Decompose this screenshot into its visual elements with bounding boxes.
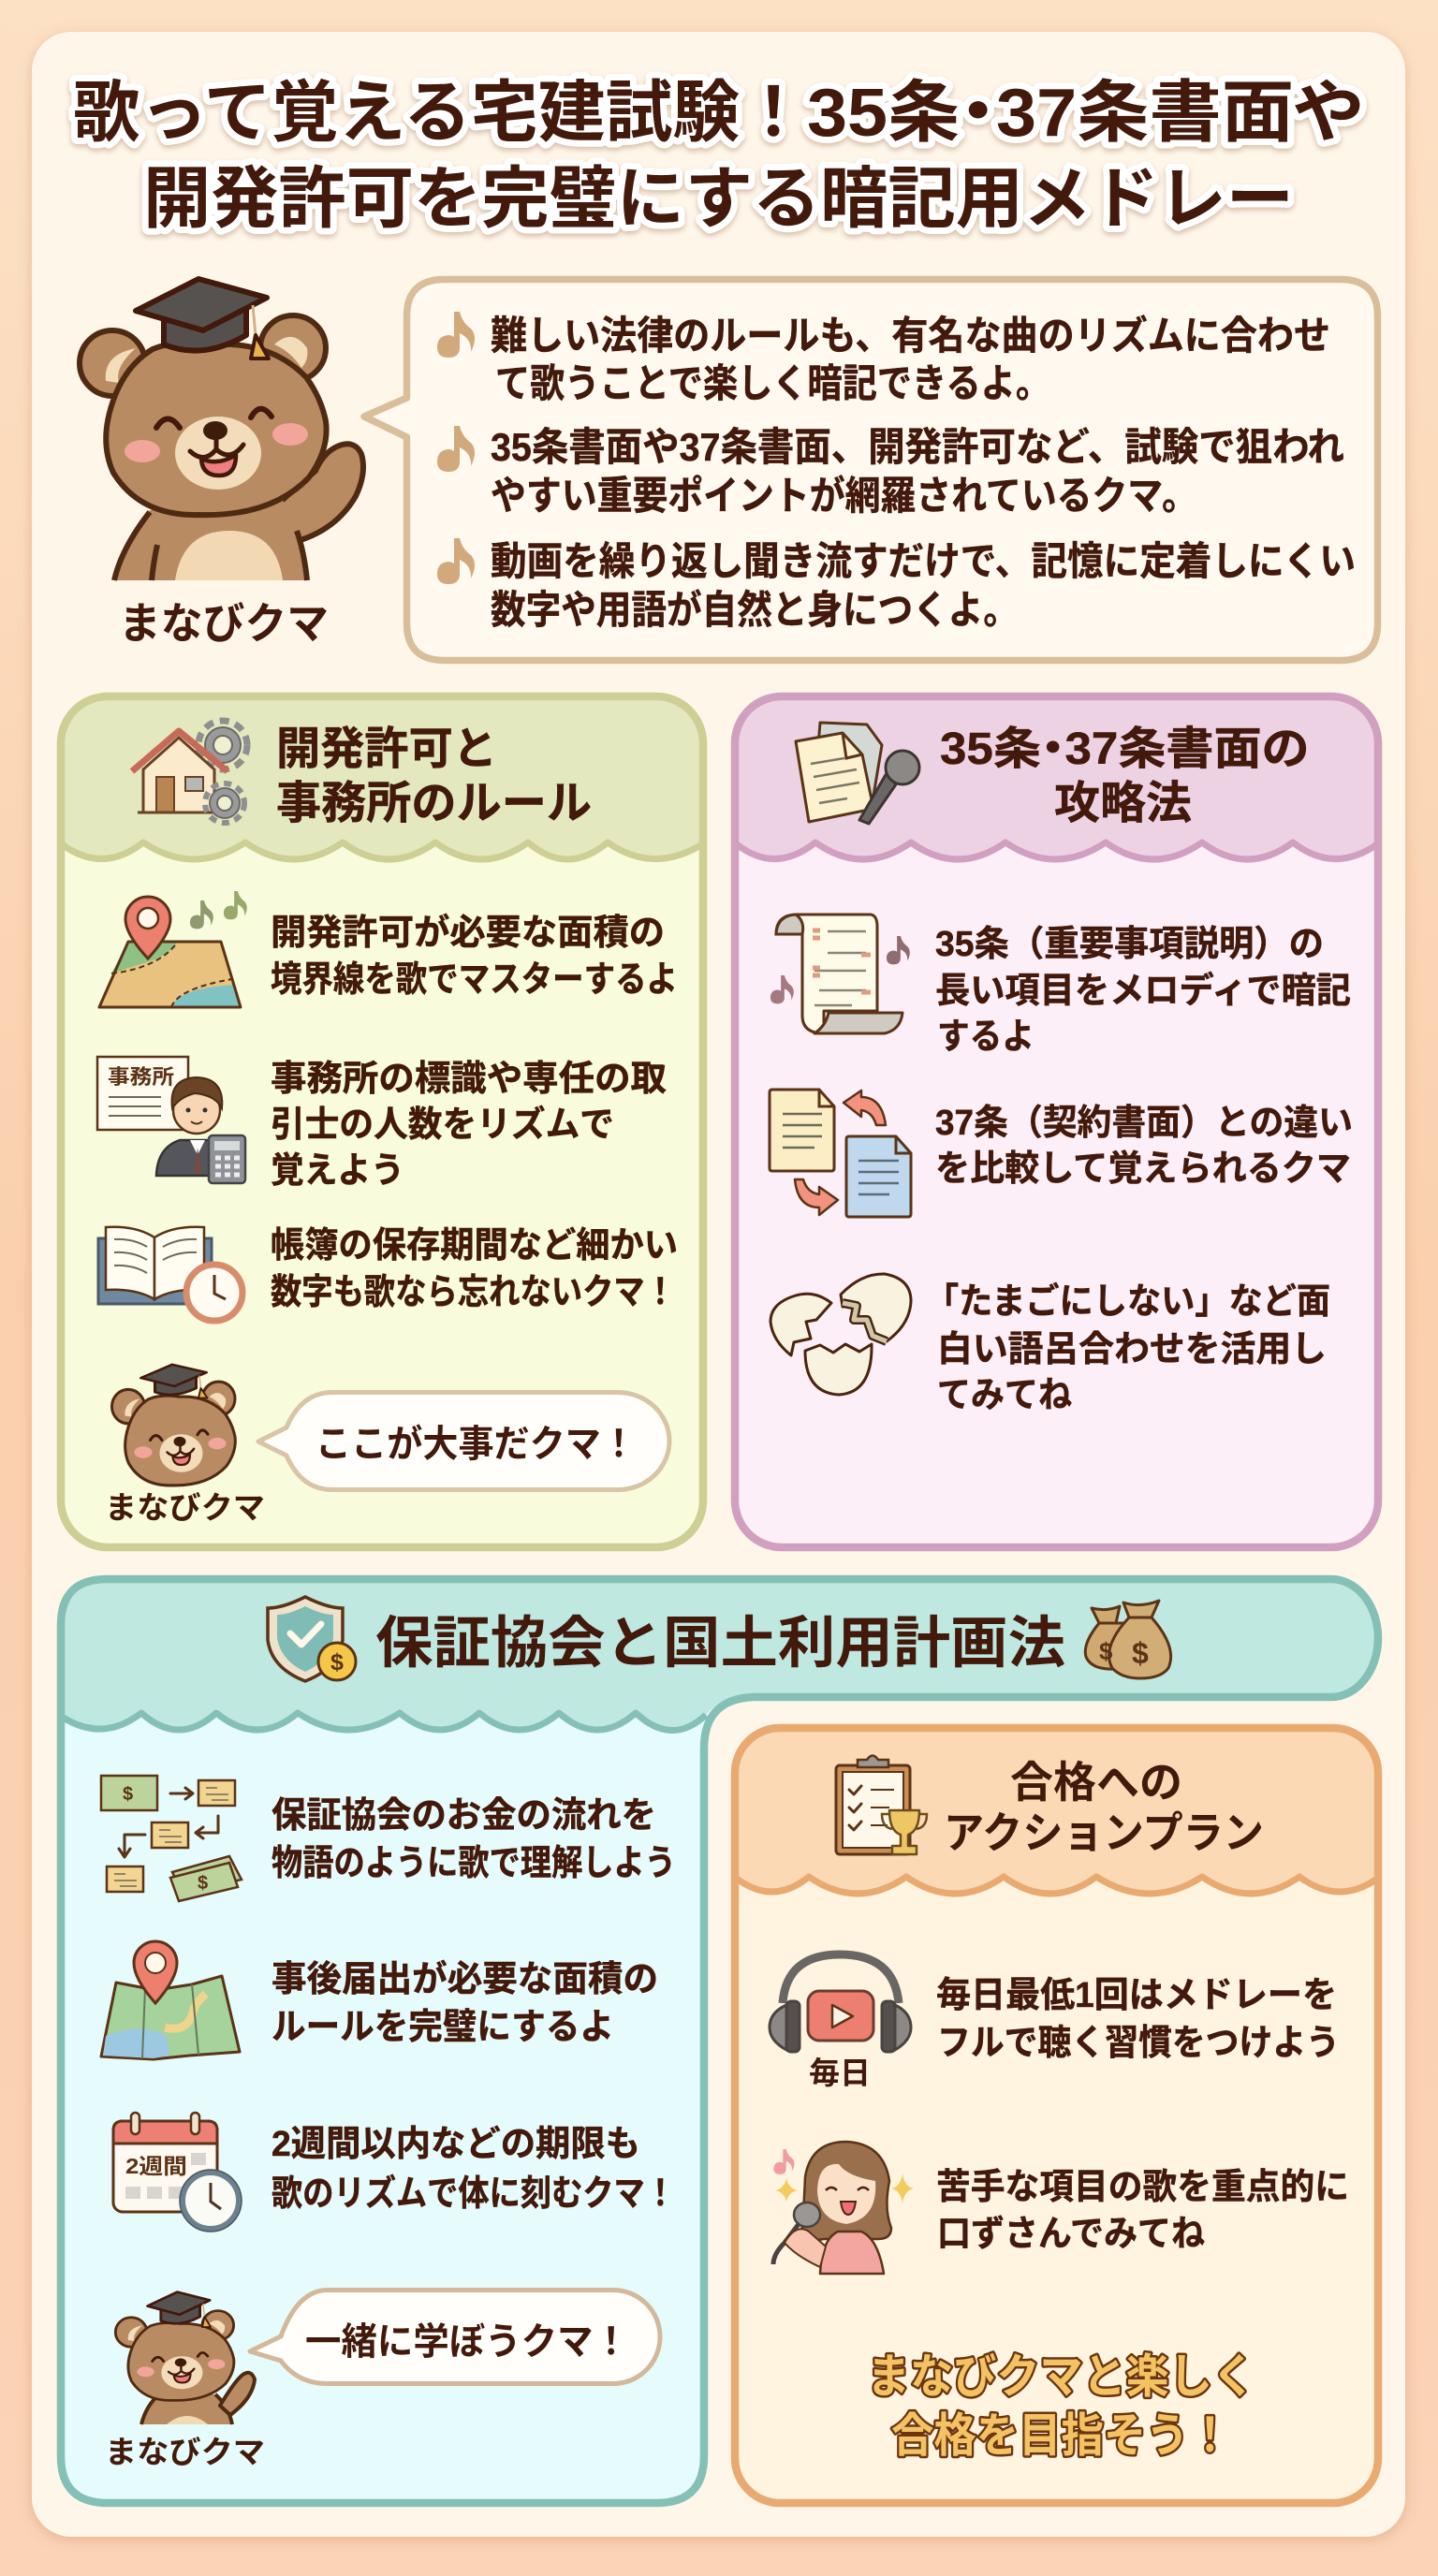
land use area note: 事後届出が必要な面積の (271, 1960, 658, 1999)
land use area note (271, 1960, 658, 2047)
speech bubble: ここが大事だクマ！ (315, 1424, 637, 1465)
panel: development permits and office rules (61, 696, 703, 1547)
intro point 3 (491, 539, 1356, 632)
mascot: bear head (112, 1365, 235, 1486)
guarantee note: 保証協会のお金の流れを (271, 1796, 656, 1836)
panel: action plan (735, 1728, 1378, 2503)
rule: office signs and agents (271, 1060, 667, 1191)
intro point 2 (491, 425, 1344, 518)
daily note (936, 1976, 1340, 2063)
icon: money bags: $ (1132, 1636, 1149, 1670)
icon: compare documents (770, 1090, 911, 1217)
icon: music note (437, 426, 475, 472)
panel: guarantee association and land use law (61, 1579, 1378, 2503)
icon: money bags: $ (1099, 1637, 1113, 1665)
guarantee note (271, 1796, 676, 1883)
icon: documents and microphone (796, 723, 919, 824)
title (73, 76, 1362, 237)
icon: music note (437, 312, 475, 358)
daily note: フルで聴く習慣をつけよう (937, 2024, 1340, 2063)
mascot name: まなびクマ (119, 599, 329, 648)
rule: office signs and agents: 事務所の標識や専任の取 (271, 1060, 667, 1099)
article 37 note: 37条（契約書面）との違い (935, 1104, 1353, 1143)
icon: zoning map (99, 891, 247, 1007)
panel heading (276, 724, 592, 828)
intro point 2: やすい重要ポイントが網羅されているクマ。 (491, 474, 1197, 518)
speech bubble: 一緒に学ぼうクマ！ (305, 2321, 629, 2363)
icon: money flow (101, 1776, 242, 1901)
weak-points note: 苦手な項目の歌を重点的に (936, 2168, 1349, 2207)
intro point 2: 35条書面や37条書面、開発許可など、試験で狙われ (491, 425, 1344, 469)
rule: development area: 境界線を歌でマスターするよ (271, 960, 678, 1000)
icon: scroll with notes (770, 915, 910, 1033)
closing message: まなびクマと楽しく (867, 2350, 1255, 2403)
icon: money flow: $ (198, 1873, 208, 1894)
deadline note: 2週間以内などの期限も (271, 2125, 640, 2164)
title: 開発許可を完璧にする暗記用メドレー (143, 162, 1294, 237)
panel heading: 保証協会と国土利用計画法 (375, 1612, 1065, 1675)
deadline note: 歌のリズムで体に刻むクマ！ (271, 2174, 676, 2214)
rule: ledgers (271, 1226, 678, 1312)
title: 歌って覚える宅建試験！ (73, 76, 807, 151)
icon: calendar and clock: 2週間 (125, 2154, 187, 2178)
icon: music note (437, 538, 475, 584)
icon: money bags (1085, 1601, 1171, 1678)
article 35 note (935, 925, 1351, 1057)
weak-points note (936, 2168, 1349, 2254)
icon: calendar and clock (113, 2113, 242, 2232)
panel heading: 攻略法 (1054, 779, 1192, 828)
tamago mnemonic note (925, 1282, 1330, 1415)
tamago mnemonic note: 白い語呂合わせを活用し (937, 1330, 1327, 1369)
icon: singing girl (773, 2142, 914, 2274)
icon: office sign and agent (97, 1057, 245, 1183)
intro point 1: て歌うことで楽しく暗記できるよ。 (495, 361, 1050, 405)
icon: clipboard and trophy (836, 1756, 927, 1854)
title: 35条・37条書面や (807, 76, 1362, 151)
icon: house and gears (132, 721, 247, 823)
article 37 note: を比較して覚えられるクマ (935, 1149, 1351, 1189)
panel heading (940, 724, 1309, 828)
panel heading: 開発許可と (276, 724, 497, 774)
closing message (867, 2350, 1255, 2462)
tamago mnemonic note: てみてね (937, 1376, 1072, 1415)
tamago mnemonic note: 「たまごにしない」など面 (925, 1282, 1330, 1322)
icon: headphones and play button (770, 1954, 911, 2090)
speech bubble (250, 2290, 660, 2383)
icon: money flow: $ (123, 1784, 133, 1805)
panel heading: アクションプラン (944, 1808, 1264, 1857)
rule: office signs and agents: 覚えよう (271, 1151, 404, 1191)
article 35 note: 長い項目をメロディで暗記 (935, 971, 1351, 1011)
article 35 note: 35条（重要事項説明）の (935, 925, 1324, 964)
intro point 3: 数字や用語が自然と身につくよ。 (491, 588, 1019, 632)
guarantee note: 物語のように歌で理解しよう (271, 1844, 676, 1883)
rule: ledgers: 数字も歌なら忘れないクマ！ (271, 1273, 676, 1312)
mascot name: まなびクマ (105, 1490, 265, 1525)
rule: ledgers: 帳簿の保存期間など細かい (271, 1226, 678, 1266)
icon: ledger and clock (98, 1227, 242, 1321)
panel heading: 事務所のルール (276, 779, 592, 828)
intro point 3: 動画を繰り返し聞き流すだけで、記憶に定着しにくい (491, 539, 1356, 583)
icon: shield and coin (268, 1597, 356, 1681)
icon: office sign and agent: 事務所 (108, 1065, 174, 1089)
intro point 1: 難しい法律のルールも、有名な曲のリズムに合わせ (491, 314, 1330, 358)
panel: articles 35 and 37 (735, 696, 1378, 1547)
daily note: 毎日最低1回はメドレーを (936, 1976, 1337, 2015)
mascot name: まなびクマ (105, 2435, 265, 2469)
rule: development area (271, 914, 678, 1000)
land use area note: ルールを完璧にするよ (271, 2008, 614, 2047)
icon: cracked egg (770, 1274, 911, 1395)
icon: shield and coin: $ (330, 1649, 344, 1676)
mascot: waving bear (115, 2292, 255, 2424)
rule: development area: 開発許可が必要な面積の (271, 914, 665, 953)
rule: office signs and agents: 引士の人数をリズムで (271, 1105, 614, 1145)
icon: folded map and pin (101, 1941, 240, 2059)
speech bubble (258, 1393, 669, 1490)
mascot: manabi bear (80, 279, 363, 648)
intro point 1 (491, 314, 1330, 405)
article 37 note (935, 1104, 1353, 1189)
panel heading (944, 1758, 1264, 1857)
closing message: 合格を目指そう！ (891, 2409, 1231, 2462)
weak-points note: 口ずさんでみてね (937, 2215, 1205, 2254)
icon: headphones and play button: 毎日 (809, 2056, 871, 2090)
article 35 note: するよ (937, 1017, 1034, 1057)
panel heading: 合格への (1010, 1758, 1182, 1807)
speech bubble: intro (364, 279, 1378, 661)
deadline note (271, 2125, 676, 2214)
panel heading: 35条・37条書面の (940, 724, 1309, 774)
